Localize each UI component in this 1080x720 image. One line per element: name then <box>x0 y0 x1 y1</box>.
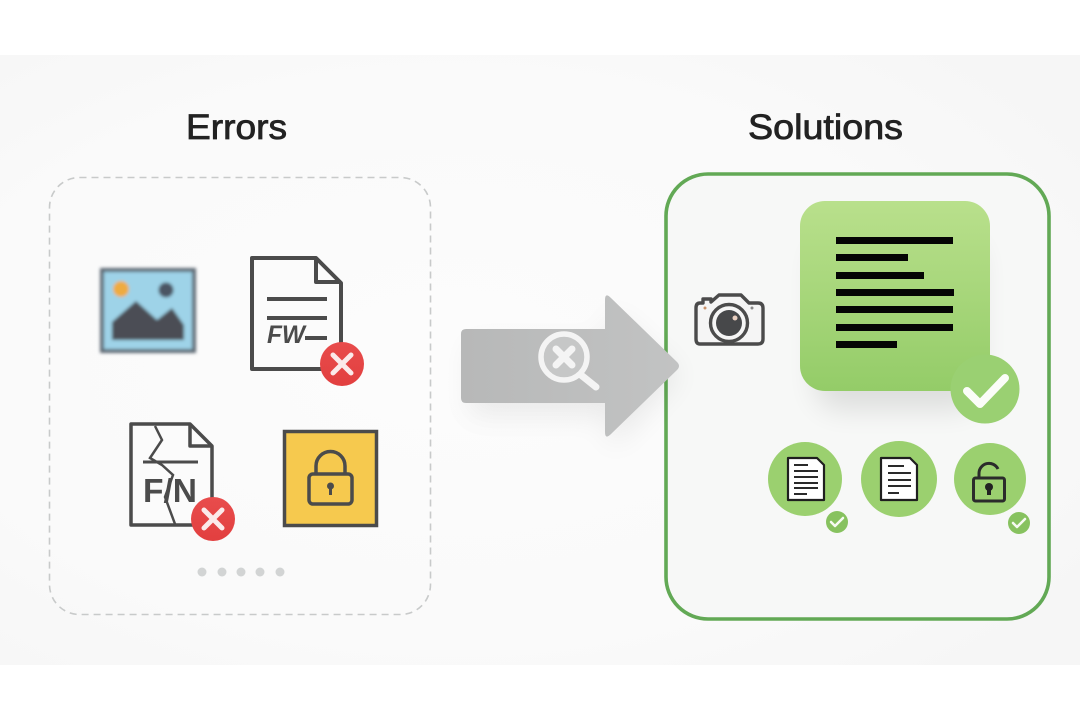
icon: small check two <box>1008 512 1030 534</box>
icon: torn document: F/N <box>143 472 197 509</box>
icon: magnifier with x <box>541 334 596 387</box>
icon: document circle one <box>768 442 842 516</box>
icon: locked yellow file <box>284 432 376 526</box>
card: extracted text <box>800 201 990 391</box>
pagination dots <box>198 568 284 576</box>
icon: red error badge <box>191 497 235 541</box>
heading: Errors: Errors <box>186 108 287 147</box>
icon: red error badge <box>320 342 364 386</box>
solution card shadow <box>815 240 980 410</box>
icon: camera <box>696 295 763 344</box>
arrow shadow <box>470 310 680 450</box>
icon: document circle two <box>861 441 937 517</box>
text lines <box>836 237 954 348</box>
icon: large check badge <box>950 354 1020 424</box>
icon: blurred image <box>102 270 194 351</box>
icon: small check one <box>826 511 848 533</box>
panel: solutions <box>666 174 1049 619</box>
heading: Solutions: Solutions <box>748 108 903 147</box>
icon: document with garbled text: FW <box>267 321 307 349</box>
icon: torn document <box>131 424 235 541</box>
icon: unlocked circle <box>954 443 1026 515</box>
arrow: errors to solutions <box>461 295 679 437</box>
panel: errors <box>50 178 430 614</box>
icon: document with garbled text <box>252 258 364 386</box>
